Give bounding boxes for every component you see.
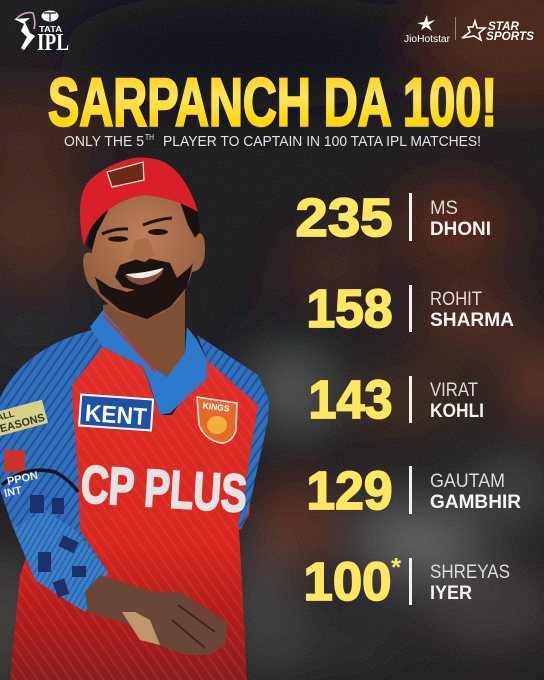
row: MS Dhoni: MS <box>430 198 458 219</box>
nose shading <box>130 238 155 262</box>
head and ears <box>83 195 205 317</box>
hand bandage <box>122 612 160 645</box>
KENT logo: KENT <box>84 400 148 431</box>
TATA IPL logo <box>14 10 69 56</box>
row: Rohit Sharma <box>306 279 514 339</box>
sleeve patch: EASONS <box>0 412 46 435</box>
JioHotstar logo: JioHotstar <box>404 33 450 45</box>
row: Virat Kohli: KOHLI <box>430 401 484 422</box>
collar and placket <box>90 310 207 415</box>
black arm band <box>2 470 78 492</box>
row: Virat Kohli: 143 <box>308 370 392 430</box>
collar red trim <box>103 315 155 372</box>
JioHotstar logo <box>404 15 450 45</box>
jersey torso <box>10 347 258 680</box>
Nippon Paint text: INT <box>3 484 23 500</box>
Star Sports logo: STAR <box>488 21 520 33</box>
forearm band <box>14 510 108 612</box>
leaderboard <box>296 188 521 612</box>
forearm chevrons <box>30 495 86 598</box>
Nippon Paint text <box>3 470 39 500</box>
teeth <box>126 268 163 278</box>
sleeve patch <box>0 400 48 436</box>
row: Rohit Sharma: ROHIT <box>430 289 482 310</box>
player photo illustration <box>0 158 269 680</box>
row: MS Dhoni <box>296 188 491 248</box>
neck <box>103 290 185 377</box>
row: Rohit Sharma: 158 <box>306 279 392 339</box>
row: MS Dhoni: 235 <box>296 188 392 248</box>
row: Virat Kohli: VIRAT <box>430 380 478 401</box>
subtitle: PLAYER TO CAPTAIN IN 100 TATA IPL MATCHES! <box>163 133 481 150</box>
logo divider <box>455 17 456 40</box>
row: Gautam Gambhir: 129 <box>306 461 392 521</box>
row: Gautam Gambhir <box>306 461 521 521</box>
TATA IPL logo: TATA <box>39 25 62 34</box>
row: MS Dhoni: DHONI <box>430 219 491 240</box>
row: Rohit Sharma: SHARMA <box>430 310 514 331</box>
eyes and brows <box>102 218 172 242</box>
Kings shield badge: KINGS <box>202 400 230 414</box>
subtitle: ONLY THE 5 <box>64 133 144 150</box>
cap badge <box>107 162 144 187</box>
Star Sports logo <box>462 21 534 43</box>
CP PLUS logo: CP PLUS <box>79 455 249 524</box>
row: Shreyas Iyer: 100 <box>304 552 392 612</box>
row: Shreyas Iyer: * <box>391 552 402 582</box>
smile <box>125 268 164 285</box>
Kings shield badge <box>197 397 237 443</box>
row: Virat Kohli <box>308 370 484 430</box>
row: Shreyas Iyer: SHREYAS <box>430 562 510 583</box>
red cap <box>80 158 198 246</box>
hair <box>87 202 200 250</box>
hand <box>85 575 227 655</box>
Star Sports logo: SPORTS <box>486 31 534 43</box>
fingers <box>172 605 215 648</box>
beard <box>95 257 193 319</box>
TATA IPL logo: IPL <box>37 30 69 56</box>
row: Gautam Gambhir: GAMBHIR <box>430 492 521 513</box>
subtitle: TH <box>145 133 154 142</box>
jersey texture <box>10 347 258 680</box>
row: Gautam Gambhir: GAUTAM <box>430 471 505 492</box>
Nippon Paint text: PPON <box>6 470 39 488</box>
row: Shreyas Iyer: IYER <box>430 583 472 604</box>
right sleeve <box>197 335 269 530</box>
left sleeve <box>0 328 108 612</box>
row: Shreyas Iyer <box>304 552 510 612</box>
sponsor P patch <box>4 450 25 472</box>
